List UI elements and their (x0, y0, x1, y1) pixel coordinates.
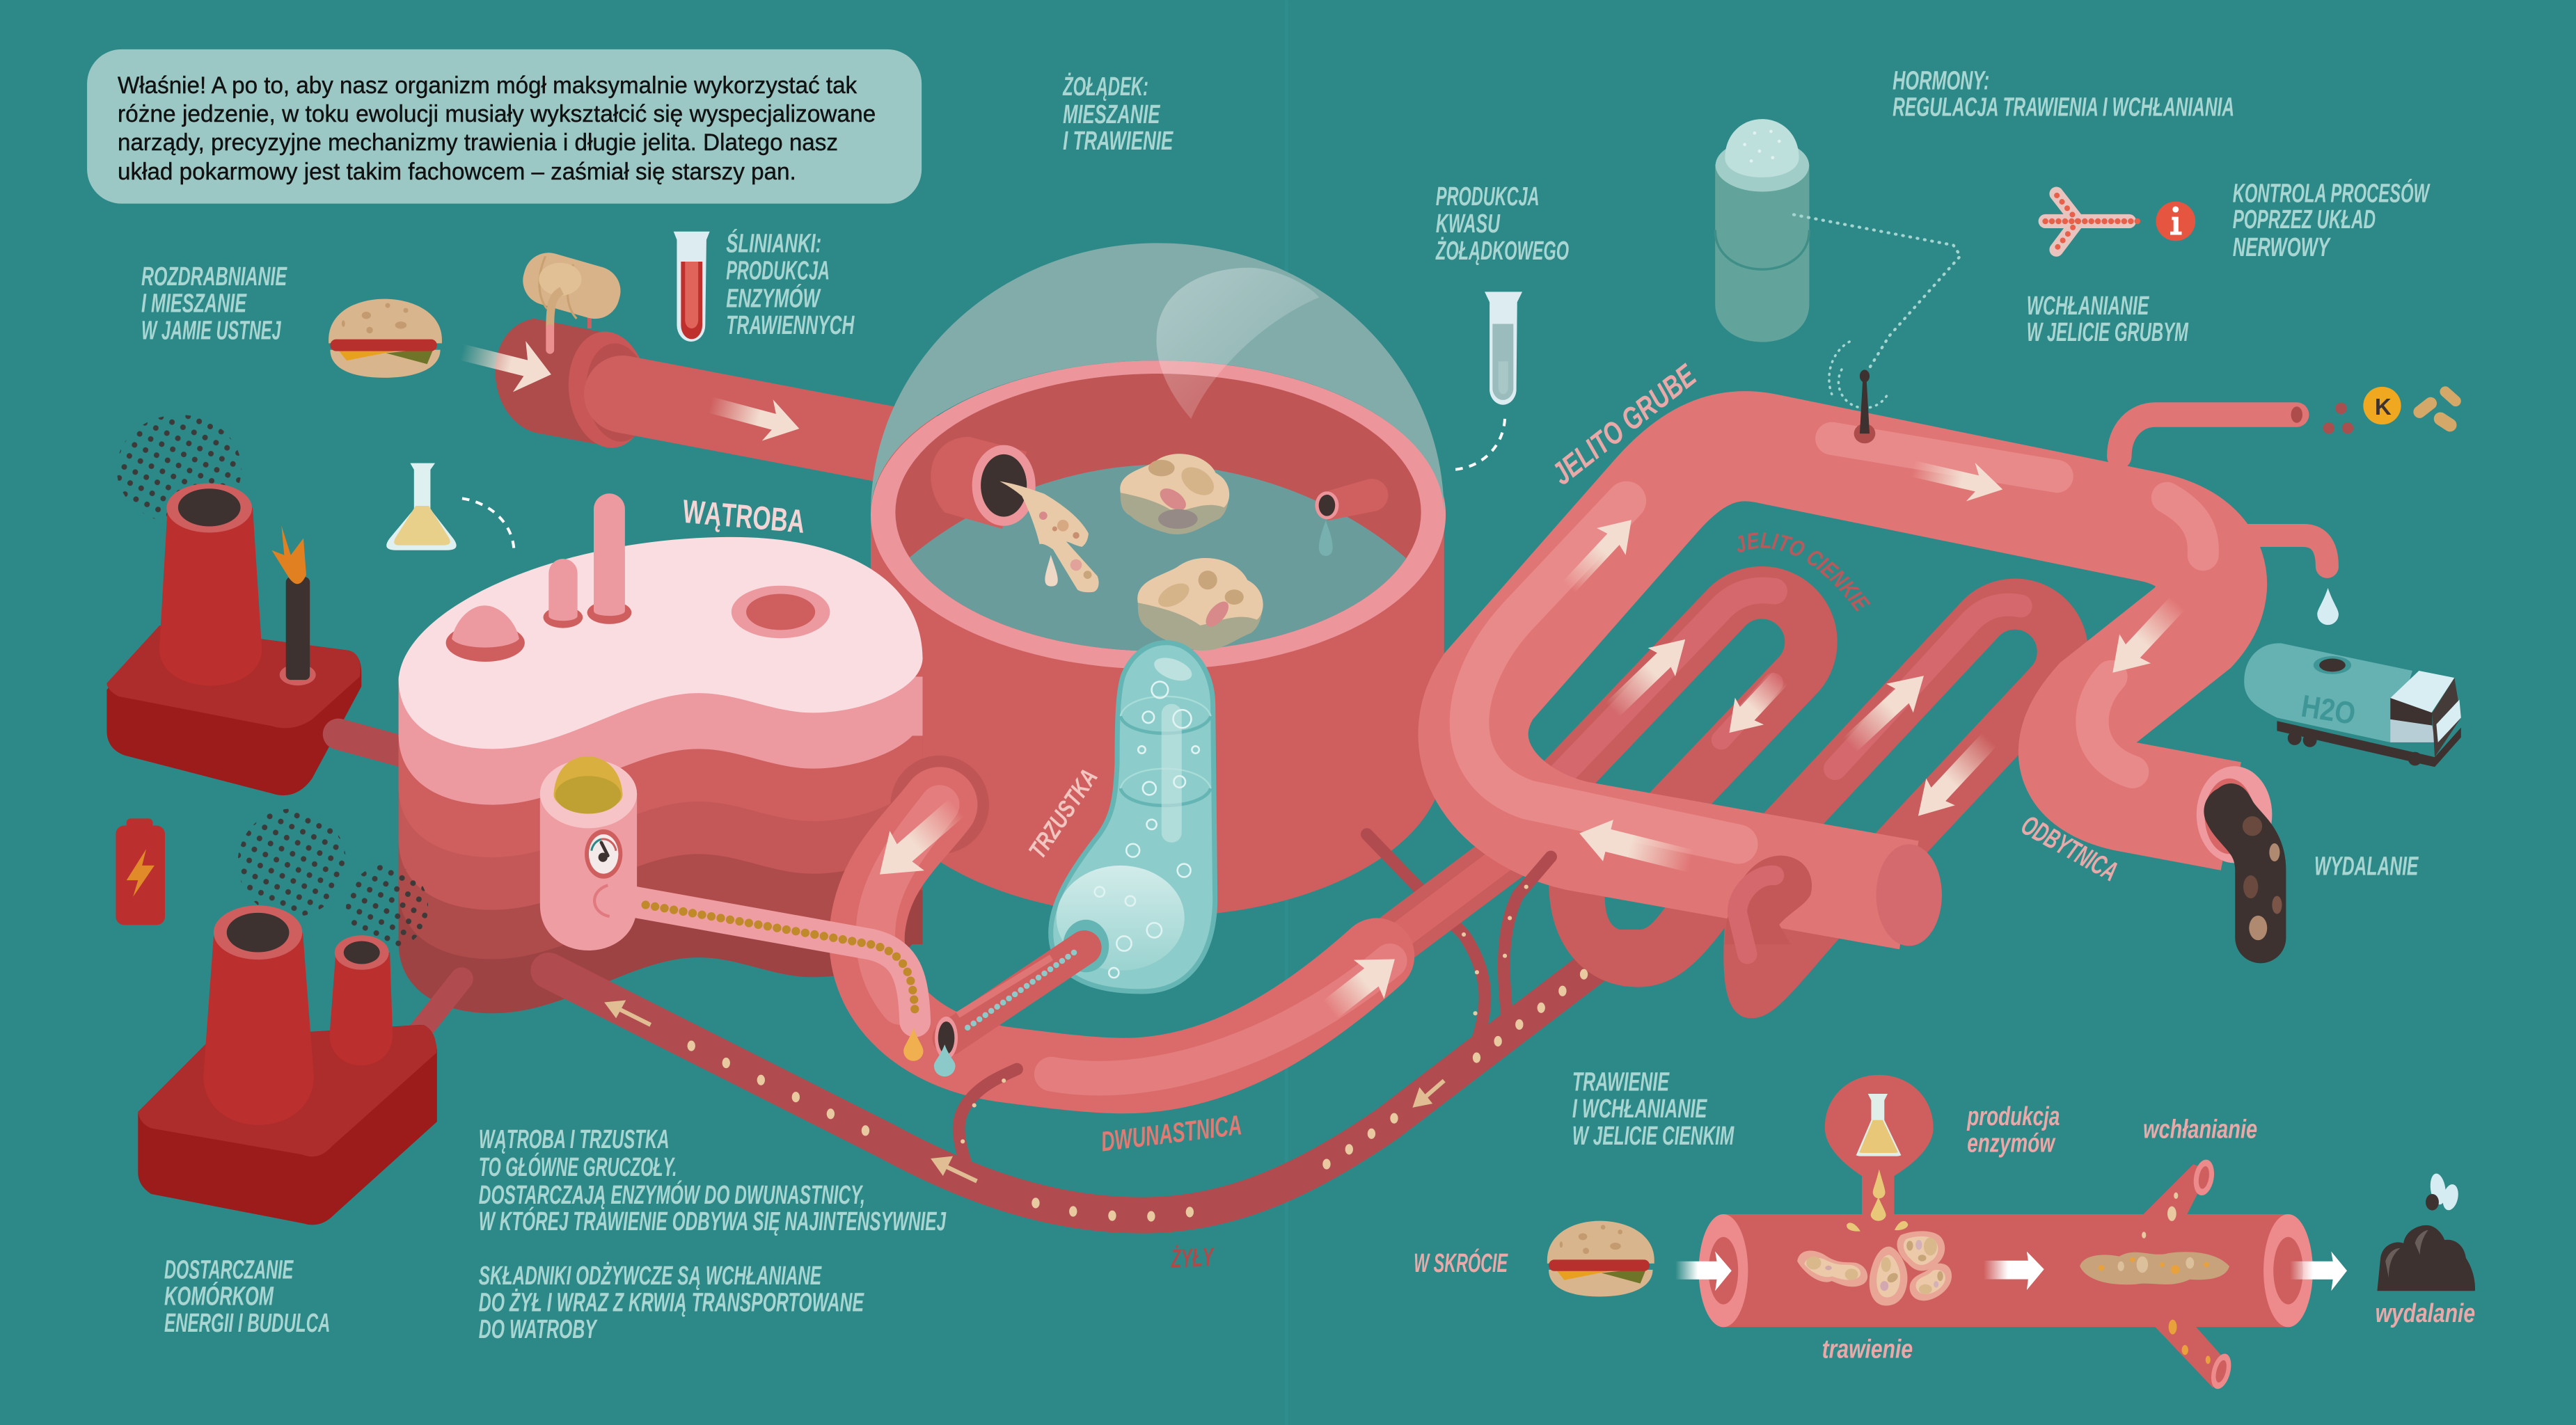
arrow: colon down (2097, 589, 2193, 687)
feces stream (2208, 783, 2282, 940)
bile tube (633, 902, 915, 1021)
tube right end (2263, 1214, 2313, 1327)
label: hormones (1893, 66, 2234, 122)
dashed arrow: flask to liver (462, 498, 514, 550)
icon: antenna signal (1829, 340, 1888, 443)
loop one (1564, 593, 1811, 822)
glass dome (871, 243, 1444, 514)
tube left end (1699, 1214, 1748, 1327)
summary diagram: intestine (1699, 1075, 2313, 1391)
label: excretion summary: wydalanie (2376, 1299, 2475, 1328)
intestine hook over colon (1725, 856, 1812, 954)
label: nutrients: DO ŻYŁ I WRAZ Z KRWIĄ TRANSPORTOWANE (479, 1288, 864, 1317)
arrow: summary three (2290, 1252, 2347, 1291)
enzyme bulb (1825, 1075, 1934, 1218)
label: production of enzymes: enzymów (1967, 1129, 2056, 1159)
speech box (87, 49, 922, 204)
pancreas inner ball (1057, 866, 1185, 971)
pancreas sheen (1162, 704, 1182, 843)
label: colon absorption (2027, 292, 2189, 347)
arrow: small intestine three (1836, 662, 1937, 760)
absorption branch up (2139, 1158, 2217, 1218)
liver opening (732, 586, 830, 638)
label: large intestine: JELITO GRUBE (1544, 357, 1703, 492)
icon: test tube with enzyme (674, 232, 710, 342)
dotted signal line (1794, 215, 1961, 381)
salivary gland roll (517, 247, 626, 350)
icon: factory two (138, 905, 437, 1225)
icon: tanker truck: H2O (2299, 688, 2358, 731)
icon: nerve (2046, 194, 2139, 250)
collar (563, 328, 654, 452)
absorbed food mass (2080, 1252, 2229, 1284)
speech box: układ pokarmowy jest takim fachowcem – zaśmiał się starszy pan. (118, 159, 796, 185)
label: small intestine digestion: I WCHŁANIANIE (1572, 1094, 1708, 1124)
stomach (871, 243, 1446, 916)
speech box: różne jedzenie, w toku ewolucji musiały wykształcić się wyspecjalizowane (118, 101, 876, 127)
liver bump (446, 605, 525, 662)
label: nervous control: KONTROLA PROCESÓW (2233, 179, 2431, 208)
heading: in short: W SKRÓCIE (1414, 1249, 1508, 1278)
arrow: summary two (1984, 1252, 2044, 1290)
dome highlight (1156, 268, 1319, 419)
arrow: duodenum ascending (1315, 940, 1410, 1029)
peanut C (1897, 1231, 1945, 1271)
icon: battery (116, 818, 165, 925)
vein dots (688, 885, 1588, 1222)
label: glands: W KTÓREJ TRAWIENIE ODBYWA SIĘ NAJINTENSYWNIEJ (479, 1207, 947, 1236)
label: colon absorption: W JELICIE GRUBYM (2027, 318, 2189, 347)
peanut A (1797, 1251, 1867, 1287)
tube body (1723, 1214, 2289, 1327)
label: cell energy: KOMÓRKOM (164, 1282, 274, 1311)
inlet pipe inside stomach (931, 437, 1036, 529)
icon: flask with bile (386, 463, 457, 550)
icon: fly (2426, 1172, 2460, 1211)
arrow: mouth entry (456, 327, 558, 400)
colon open end (1876, 844, 1942, 946)
label: salivary glands: ŚLINIANKI: (726, 230, 821, 259)
label: chewing (141, 262, 287, 345)
label: stomach: ŻOŁĄDEK: (1063, 72, 1148, 102)
stomach wall (871, 514, 1444, 916)
pipe: factory one to liver (338, 734, 411, 754)
label: acid production (1435, 182, 1569, 266)
duodenum (867, 756, 1390, 1078)
icon: nutrient particles (2323, 403, 2353, 434)
liver pegs (544, 493, 631, 628)
mouth and esophagus (496, 319, 920, 452)
label: nervous control (2233, 179, 2431, 262)
label: nutrients: DO WATROBY (479, 1315, 598, 1344)
label: nutrients: SKŁADNIKI ODŻYWCZE SĄ WCHŁANIANE (479, 1261, 822, 1291)
icon: acid test tube (1485, 292, 1522, 405)
label: salivary glands: TRAWIENNYCH (726, 311, 855, 340)
label: stomach (1063, 72, 1174, 156)
label: acid production: PRODUKCJA (1436, 182, 1540, 212)
icon: hormone gland (1715, 119, 1809, 342)
icon: tanker truck (2244, 643, 2461, 767)
lump under colon (1549, 870, 1728, 987)
label: rectum: ODBYTNICA (2016, 809, 2123, 887)
vein: main (548, 959, 1604, 1216)
dashed arrow: tube to stomach (1453, 419, 1505, 470)
icon: vitamin K coin (2363, 387, 2401, 424)
label: excretion: WYDALANIE (2314, 852, 2419, 881)
icon: water drop (2317, 588, 2339, 625)
esophagus tube (623, 394, 920, 451)
arrow: colon up (1554, 507, 1646, 600)
liver layers (399, 593, 923, 1013)
gauge (585, 829, 622, 879)
smoke dots: factory two, small (346, 864, 428, 950)
arrow: colon top (1909, 449, 2007, 509)
label: cell energy: ENERGII I BUDULCA (164, 1309, 330, 1338)
duodenum connector (1388, 821, 1553, 944)
label: salivary glands: ENZYMÓW (726, 284, 821, 313)
liver top (399, 537, 923, 749)
icon: pills (2411, 384, 2463, 434)
pipe: factory two to liver (418, 979, 461, 1035)
label: nutrients (479, 1261, 864, 1344)
label: small intestine: JELITO CIENKIE (1737, 532, 1871, 612)
small intestine (1549, 591, 2062, 1018)
food chunk two (1137, 558, 1263, 651)
stomach interior (895, 374, 1421, 651)
arrow: esophagus (705, 384, 805, 449)
pancreas rings (1121, 696, 1211, 806)
label: hormones: HORMONY: (1893, 66, 1989, 95)
vein: side branches (959, 857, 1551, 1161)
label: glands: TO GŁÓWNE GRUCZOŁY. (479, 1153, 677, 1182)
icon: factory one (106, 484, 361, 795)
label: salivary glands: PRODUKCJA (726, 256, 830, 285)
label: production of enzymes: produkcja (1967, 1102, 2060, 1131)
drops at duodenum entry (903, 1017, 958, 1076)
arrow: small intestine four (1904, 726, 2005, 829)
icon: information circle (2156, 202, 2195, 241)
speech box: Właśnie! A po to, aby nasz organizm mógł maksymalnie wykorzystać tak (118, 72, 858, 99)
absorbed particles (2142, 1193, 2211, 1364)
arrow: small intestine one (1598, 626, 1699, 724)
mouth cup (496, 319, 611, 447)
icon: burger small (1547, 1221, 1654, 1296)
label: nervous control: POPRZEZ UKŁAD (2233, 205, 2376, 234)
colon highlights (1469, 438, 2203, 844)
rectum opening (2197, 766, 2272, 863)
pancreas bubbles (1095, 682, 1199, 978)
label: duodenum: DWUNASTNICA (1099, 1109, 1243, 1158)
label: pancreas: TRZUSTKA (1023, 764, 1103, 863)
enzyme drops (1847, 1170, 1908, 1232)
arrow: small intestine two (1715, 664, 1795, 747)
label: small intestine digestion: W JELICIE CIENKIM (1572, 1122, 1735, 1151)
food stream (999, 481, 1099, 592)
label: stomach: MIESZANIE (1063, 100, 1161, 129)
arrow: summary one (1675, 1252, 1732, 1291)
pancreatic duct (949, 920, 1109, 1038)
loop two (1783, 604, 2062, 856)
icon: stool (2377, 1225, 2475, 1291)
smoke dots: factory two, large (238, 809, 346, 917)
label: colon absorption: WCHŁANIANIE (2027, 292, 2150, 321)
label: nervous control: NERWOWY (2233, 233, 2332, 262)
label: acid production: ŻOŁĄDKOWEGO (1435, 237, 1569, 266)
label: hormones: REGULACJA TRAWIENIA I WCHŁANIANIA (1893, 93, 2234, 122)
label: chewing: I MIESZANIE (141, 289, 247, 318)
label: absorption: wchłanianie (2143, 1115, 2257, 1145)
label: chewing: W JAMIE USTNEJ (141, 316, 281, 345)
peanut B (1870, 1246, 1908, 1305)
gastric fluid (909, 465, 1406, 651)
label: stomach: I TRAWIENIE (1063, 127, 1174, 156)
lower stub (1723, 887, 1848, 1018)
vein: branch behind duodenum (1367, 834, 1485, 1046)
smoke dots: factory one (117, 415, 242, 523)
label: chewing: ROZDRABNIANIE (141, 262, 287, 292)
peanut D (1910, 1264, 1952, 1300)
liver (399, 493, 923, 1013)
label: acid production: KWASU (1436, 209, 1501, 239)
water pipe (2244, 535, 2327, 566)
gallbladder cylinder (540, 756, 637, 950)
label: small intestine digestion (1572, 1067, 1735, 1151)
label: production of enzymes (1967, 1102, 2060, 1159)
arrow: duodenum descending (862, 788, 974, 894)
heading: liver: WĄTROBA (681, 493, 806, 541)
digesting food (1797, 1231, 1952, 1305)
enzyme flask (1856, 1094, 1901, 1156)
label: glands: WĄTROBA I TRZUSTKA (479, 1125, 670, 1154)
outlet pipe and drip (1315, 479, 1388, 556)
label: glands: DOSTARCZAJĄ ENZYMÓW DO DWUNASTNICY, (479, 1181, 865, 1210)
stomach rim (871, 360, 1446, 669)
label: digestion: trawienie (1822, 1335, 1913, 1364)
absorption branch down (2152, 1323, 2234, 1391)
label: cell energy (164, 1256, 330, 1338)
label: cell energy: DOSTARCZANIE (164, 1256, 294, 1285)
label: salivary glands (726, 230, 855, 340)
label: small intestine digestion: TRAWIENIE (1572, 1067, 1670, 1097)
speech box: narządy, precyzyjne mechanizmy trawienia i długie jelita. Dlatego nasz (118, 129, 838, 156)
food chunk one (1120, 454, 1229, 534)
icon: vitamin K coin: K (2375, 395, 2392, 420)
colon (1469, 438, 2231, 895)
arrow: colon left (1574, 813, 1696, 882)
nutrient pipe (2119, 406, 2302, 456)
label: veins: ŻYŁY (1170, 1243, 1216, 1274)
pancreas (1051, 643, 1215, 992)
label: glands (479, 1125, 947, 1236)
icon: burger (329, 299, 442, 378)
vein arrows (604, 1000, 1444, 1181)
